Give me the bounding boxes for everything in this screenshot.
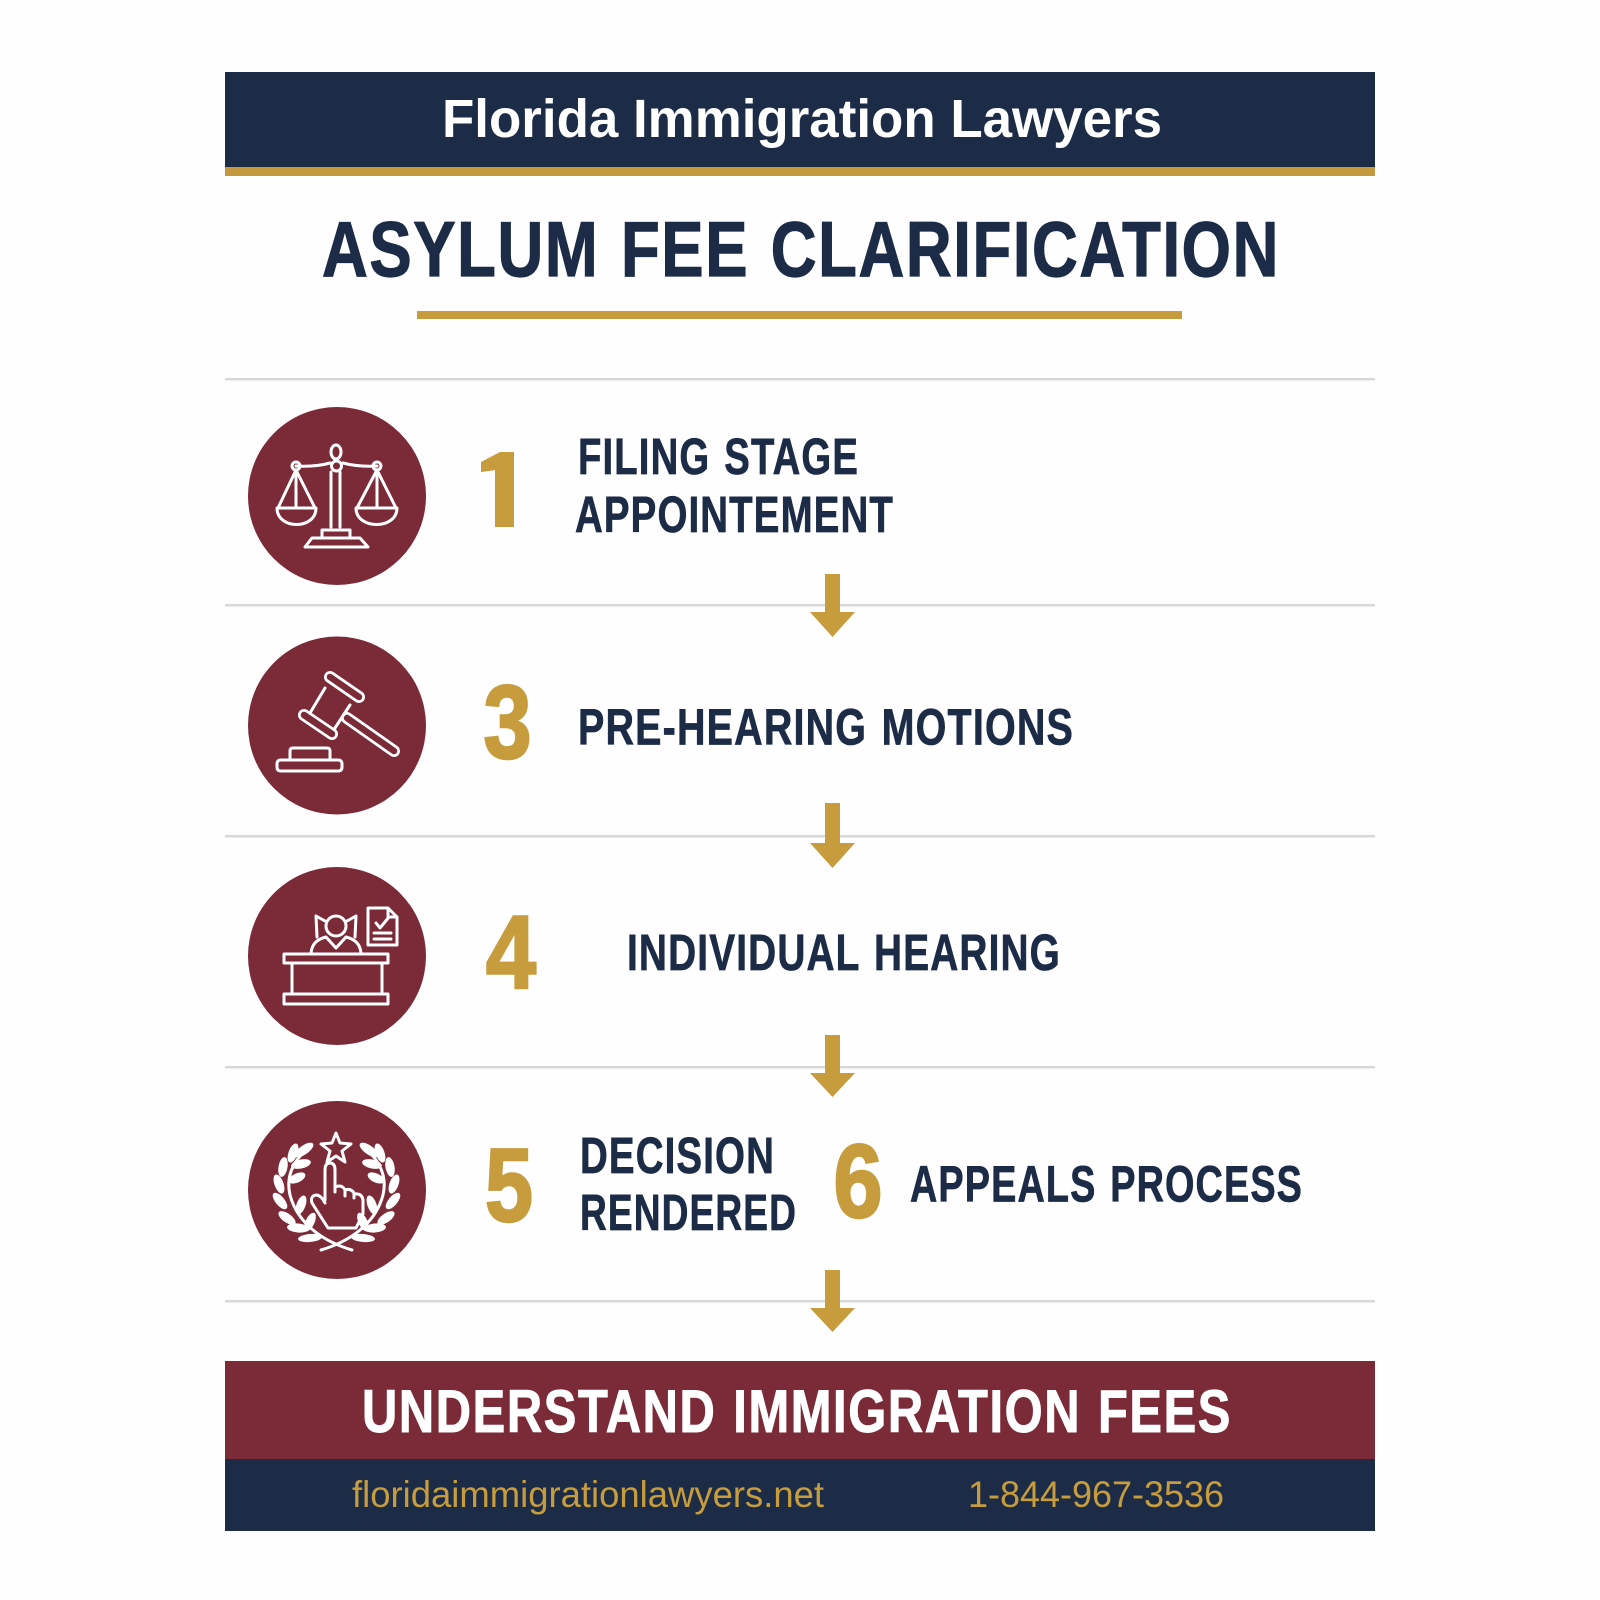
label: appeals process: APPEALS PROCESS xyxy=(910,1156,1303,1212)
number 5: 5 xyxy=(485,1128,533,1244)
call to action text: UNDERSTAND IMMIGRATION FEES xyxy=(362,1378,1232,1445)
label: filing stage appointement xyxy=(575,428,894,543)
contact footer xyxy=(225,1459,1375,1531)
arrow 2 xyxy=(810,803,855,868)
header banner xyxy=(225,72,1375,176)
icon: gavel xyxy=(248,636,426,814)
label: filing stage appointement: APPOINTEMENT xyxy=(575,486,894,543)
label: decision rendered xyxy=(580,1127,797,1241)
label: individual hearing: INDIVIDUAL HEARING xyxy=(627,924,1061,981)
number 1: 1 xyxy=(474,434,530,550)
icon: scales of justice xyxy=(248,407,426,585)
step 5: decision rendered xyxy=(248,1101,797,1279)
arrow 1 xyxy=(810,574,855,637)
step 3: pre-hearing motions xyxy=(248,636,1074,814)
label: decision rendered: DECISION xyxy=(580,1127,775,1184)
label: decision rendered: RENDERED xyxy=(580,1184,797,1241)
website: floridaimmigrationlawyers.net xyxy=(352,1474,825,1515)
icon: judge at bench with document xyxy=(248,867,426,1045)
arrow 3 xyxy=(810,1035,855,1097)
number 3: 3 xyxy=(484,665,532,781)
number 6: 6 xyxy=(834,1124,882,1240)
number 4: 4 xyxy=(486,895,536,1011)
label: filing stage appointement: FILING STAGE xyxy=(578,428,859,485)
arrow 4 xyxy=(810,1270,855,1332)
title: ASYLUM FEE CLARIFICATION xyxy=(322,205,1280,293)
phone number: 1-844-967-3536 xyxy=(968,1474,1224,1515)
step 4: individual hearing xyxy=(248,867,1061,1045)
number 1 xyxy=(481,452,514,527)
call to action banner xyxy=(225,1361,1375,1460)
icon: laurel wreath, star and pointing hand xyxy=(248,1101,426,1279)
step 6: appeals process xyxy=(834,1124,1303,1240)
title underline xyxy=(417,311,1182,319)
step 1: filing stage appointment xyxy=(248,407,894,585)
label: pre-hearing motions: PRE-HEARING MOTIONS xyxy=(578,698,1074,756)
firm name: Florida Immigration Lawyers xyxy=(442,89,1162,149)
